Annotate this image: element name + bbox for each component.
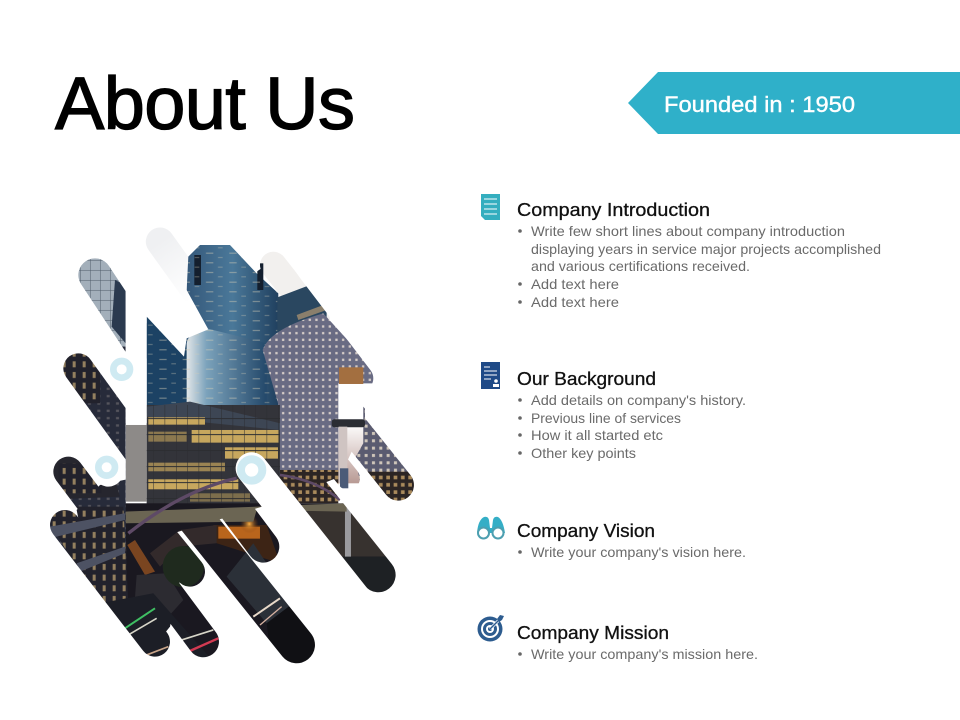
section: company introduction: displaying years in service major projects accomplished (531, 241, 881, 257)
section: company introduction: and various certifications received. (531, 258, 750, 274)
section: company introduction: Add text here (531, 294, 619, 310)
far right building (356, 406, 408, 480)
right perforated building (263, 313, 375, 480)
warm base of right building (280, 470, 338, 503)
bridge (125, 503, 347, 523)
icon: binoculars (477, 517, 505, 538)
icon: navy profile document (481, 362, 500, 389)
section: company vision (477, 517, 746, 560)
section: our background (481, 362, 746, 461)
trees (163, 546, 204, 587)
tunnel glow (214, 525, 277, 560)
orange road (127, 540, 155, 575)
dark ground (126, 503, 386, 656)
lower cylinder (187, 328, 267, 410)
accent rings (98, 361, 262, 481)
section: our background: Our Background (517, 369, 656, 389)
section: company introduction: Add text here (531, 276, 619, 292)
section: company mission: Write your company's mission here. (531, 646, 758, 662)
section: company introduction: Company Introduction (517, 200, 710, 220)
cityscape photo cut into diagonal capsules (50, 228, 414, 664)
icon: teal document (481, 194, 500, 220)
main tower (187, 245, 278, 410)
section: our background: Previous line of services (531, 410, 681, 426)
section: company introduction (481, 194, 881, 310)
section: company vision: Write your company's vision here. (531, 544, 746, 560)
section: company vision: Company Vision (517, 521, 655, 541)
left blue tower (147, 317, 188, 413)
left buildings (77, 344, 126, 504)
section: company mission (478, 615, 758, 662)
section: company mission: Company Mission (517, 623, 669, 643)
icon: target (478, 615, 504, 642)
lamp post (332, 419, 365, 427)
back dark block (277, 285, 327, 337)
section: company introduction: Write few short lines about company introduction (531, 223, 845, 239)
section: our background: How it all started etc (531, 427, 663, 443)
banner: founded in 1950: Founded in : 1950 (664, 92, 855, 117)
pale sky capsule (160, 242, 207, 307)
section: our background: Other key points (531, 445, 636, 461)
lit central building (147, 405, 280, 505)
section: our background: Add details on company's history. (531, 392, 746, 408)
road bottom and light trails (108, 594, 171, 633)
title: About Us (55, 62, 355, 145)
banner: founded in 1950 (628, 72, 960, 134)
